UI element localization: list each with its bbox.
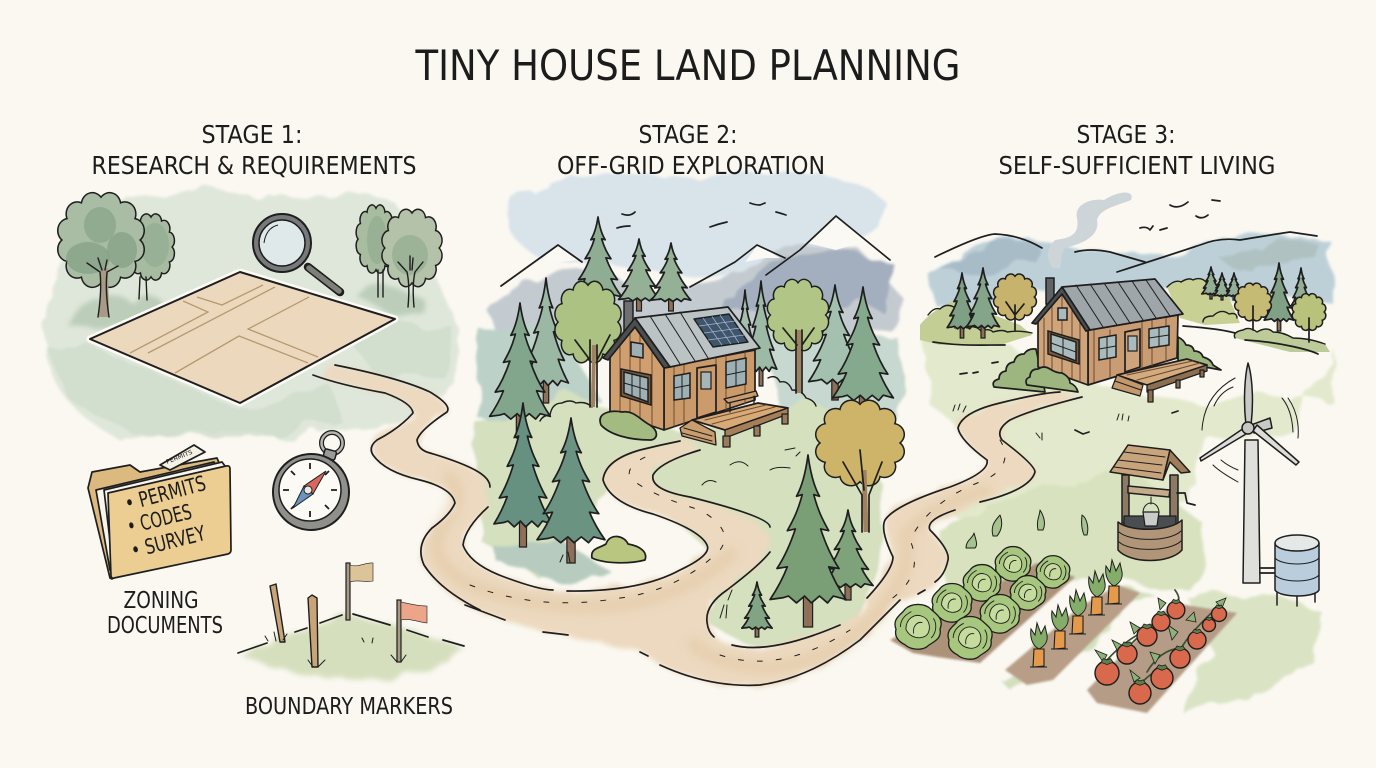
heading: stage 3: SELF-SUFFICIENT LIVING bbox=[998, 151, 1276, 180]
mountains bbox=[501, 216, 890, 287]
steps bbox=[680, 420, 716, 445]
text: folder list: • PERMITS bbox=[122, 471, 208, 516]
icon: magnifying glass bbox=[253, 214, 340, 292]
mountains bbox=[935, 232, 1317, 272]
yellow tree bbox=[816, 400, 904, 532]
text: folder list: • SURVEY bbox=[128, 521, 208, 563]
walls bbox=[1088, 315, 1178, 385]
roof bbox=[1062, 279, 1183, 330]
hedge lines bbox=[933, 326, 1318, 354]
hedges bbox=[540, 377, 816, 421]
icon: boundary markers bbox=[238, 563, 464, 667]
grass tufts bbox=[953, 404, 1129, 440]
vegetable garden bbox=[890, 547, 1237, 713]
smoke bbox=[1048, 192, 1132, 268]
tomato bed bbox=[1087, 590, 1237, 713]
winding dirt path bbox=[313, 365, 1082, 685]
heading: stage 2: STAGE 2: bbox=[638, 120, 738, 149]
icon: zoning documents folder bbox=[88, 445, 231, 579]
roof bbox=[635, 307, 760, 367]
heading: stage 3: STAGE 3: bbox=[1076, 120, 1176, 149]
distant trees bbox=[947, 263, 1326, 342]
chimney bbox=[1046, 278, 1054, 304]
panel: stage 2 off-grid bbox=[490, 203, 904, 637]
green bush bbox=[592, 536, 646, 563]
side wall bbox=[664, 350, 755, 430]
tiny house with solar panel bbox=[603, 301, 788, 447]
icon: compass bbox=[273, 432, 349, 530]
front bush bbox=[1026, 367, 1078, 392]
water well bbox=[1110, 445, 1195, 560]
solar panel bbox=[694, 314, 748, 347]
label: zoning documents bbox=[107, 588, 223, 639]
cabbage bed bbox=[890, 547, 1075, 663]
tiny house bbox=[1032, 278, 1207, 402]
bench bbox=[724, 391, 758, 412]
heading: stage 1: STAGE 1: bbox=[202, 120, 302, 149]
heading: stage 2: OFF-GRID EXPLORATION bbox=[557, 151, 825, 180]
trees beside house bbox=[555, 279, 829, 407]
icon: trees left bbox=[58, 193, 174, 317]
heading: stage 3 bbox=[998, 120, 1276, 180]
heading: stage 1: RESEARCH & REQUIREMENTS bbox=[92, 151, 416, 180]
deck bbox=[1117, 359, 1207, 385]
windows bbox=[621, 342, 746, 405]
label: zoning documents: ZONING bbox=[124, 588, 198, 614]
door bbox=[697, 365, 716, 418]
text: tab label: PERMITS bbox=[165, 449, 194, 466]
icon: trees right bbox=[356, 205, 442, 307]
heading: stage 1 bbox=[92, 120, 416, 180]
door bbox=[1125, 329, 1140, 372]
stake 1 bbox=[270, 584, 285, 642]
wind turbine bbox=[1200, 363, 1299, 583]
label: zoning documents: DOCUMENTS bbox=[107, 613, 223, 639]
bushes beside house bbox=[993, 349, 1045, 392]
label: boundary markers: BOUNDARY MARKERS bbox=[245, 694, 453, 720]
text: folder list bbox=[122, 471, 208, 563]
sprouts bbox=[966, 510, 1088, 548]
deck bbox=[692, 403, 788, 430]
birds bbox=[617, 203, 786, 228]
text: folder list: • CODES bbox=[124, 500, 194, 539]
heading: stage 2 bbox=[557, 120, 825, 180]
steps bbox=[1112, 375, 1143, 396]
back hedges bbox=[920, 278, 1330, 352]
icon: land map bbox=[90, 272, 395, 403]
back pines bbox=[490, 217, 893, 438]
watercolor washes bbox=[45, 172, 1335, 715]
foreground pines bbox=[494, 403, 873, 637]
birds bbox=[960, 200, 1220, 434]
chimney bbox=[624, 301, 633, 331]
windows bbox=[1048, 308, 1169, 364]
title: TINY HOUSE LAND PLANNING bbox=[415, 41, 961, 90]
panel: stage 3 self-sufficient bbox=[890, 192, 1330, 713]
bushes near house bbox=[600, 411, 656, 440]
flag tan bbox=[346, 563, 373, 620]
gable wall bbox=[610, 327, 664, 430]
grass tufts bbox=[560, 448, 800, 618]
panel: stage 1 research bbox=[58, 193, 464, 720]
water tank bbox=[1260, 535, 1319, 606]
carrot bed bbox=[1005, 560, 1140, 685]
flag red bbox=[397, 600, 427, 662]
stake 2 bbox=[308, 595, 318, 667]
